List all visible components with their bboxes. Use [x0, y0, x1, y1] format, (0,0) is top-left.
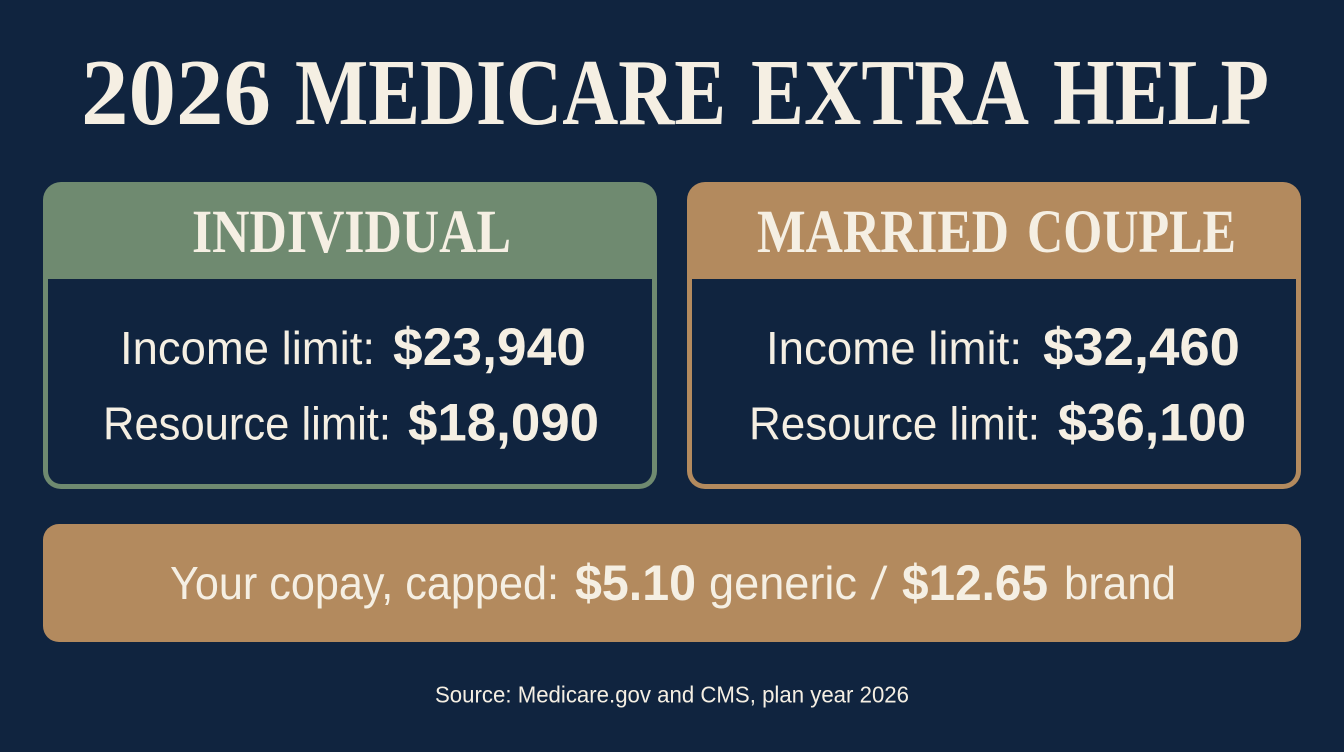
copay banner: $5.10: [575, 555, 696, 611]
title: MEDICARE: [295, 41, 726, 145]
copay banner: /: [869, 557, 889, 609]
title: HELP: [1053, 41, 1269, 145]
copay banner: brand: [1064, 557, 1176, 609]
income limit row: $32,460: [1043, 318, 1240, 377]
resource limit row: [749, 394, 1246, 452]
title: 2026: [81, 41, 271, 145]
copay banner: generic: [709, 557, 857, 609]
heading: individual: INDIVIDUAL: [192, 199, 511, 266]
copay banner: $12.65: [902, 555, 1048, 611]
heading: married couple: COUPLE: [1027, 199, 1236, 266]
resource limit row: Resource limit:: [103, 398, 391, 450]
resource limit row: $36,100: [1058, 394, 1246, 452]
income limit row: Income limit:: [120, 322, 375, 374]
title: [81, 41, 1269, 145]
source note: Source: Medicare.gov and CMS, plan year 2026: [435, 682, 909, 708]
panel: married couple: [687, 182, 1301, 489]
income limit row: [120, 318, 586, 377]
heading: married couple: [757, 199, 1236, 266]
income limit row: Income limit:: [766, 322, 1022, 374]
copay banner: [43, 524, 1301, 642]
income limit row: $23,940: [393, 318, 586, 377]
copay banner: Your copay, capped:: [170, 557, 559, 609]
resource limit row: Resource limit:: [749, 398, 1040, 450]
income limit row: [766, 318, 1240, 377]
resource limit row: $18,090: [408, 394, 599, 452]
panel: individual: [43, 182, 657, 489]
title: EXTRA: [751, 41, 1029, 145]
resource limit row: [103, 394, 599, 452]
heading: married couple: MARRIED: [757, 199, 1009, 266]
